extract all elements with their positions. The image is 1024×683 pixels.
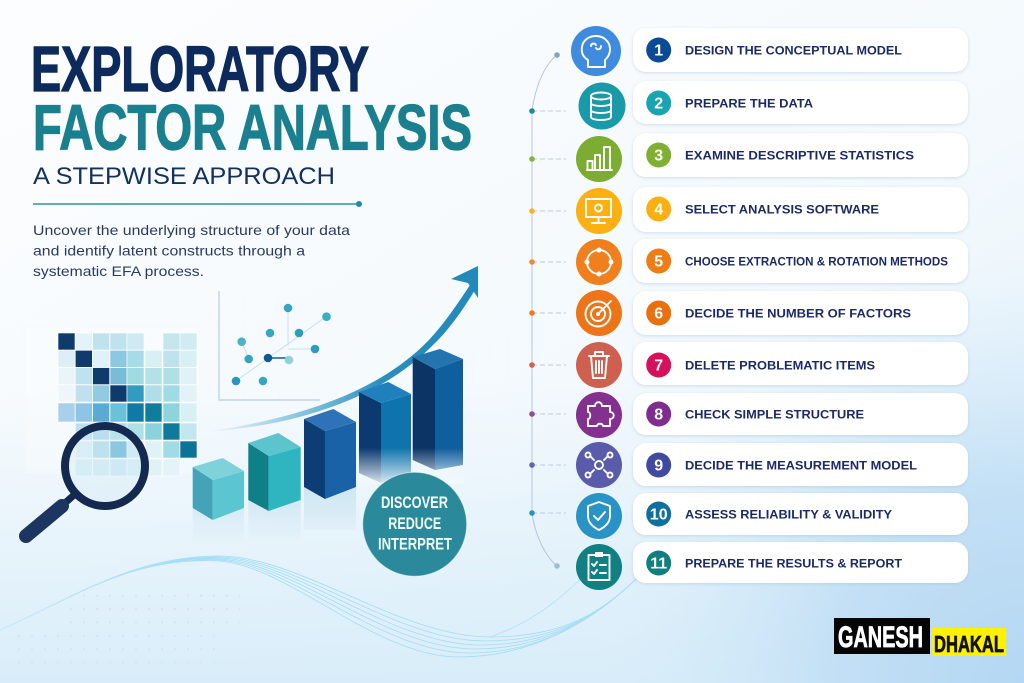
- step 6: DECIDE THE NUMBER OF FACTORS: [685, 306, 911, 320]
- step 9: 9: [654, 458, 663, 474]
- badge: discover reduce interpret: REDUCE: [388, 515, 441, 533]
- badge: discover reduce interpret: INTERPRET: [378, 536, 452, 554]
- step 6: 6: [654, 306, 663, 322]
- step 5: [576, 239, 968, 285]
- icon: magnifying glass: [26, 426, 145, 536]
- step 5: CHOOSE EXTRACTION & ROTATION METHODS: [685, 254, 948, 268]
- tall bar fade: [358, 448, 464, 484]
- step 9: DECIDE THE MEASUREMENT MODEL: [685, 458, 917, 472]
- step 1: DESIGN THE CONCEPTUAL MODEL: [685, 44, 902, 58]
- step 2: PREPARE THE DATA: [685, 96, 813, 110]
- step 3: 3: [654, 148, 663, 164]
- icon: clipboard checklist: [576, 544, 622, 590]
- step 1: [571, 26, 968, 76]
- step 8: [576, 392, 968, 438]
- bar 2: [248, 433, 301, 511]
- step 9: [576, 442, 968, 488]
- icon: trash can: [576, 342, 622, 388]
- badge: discover reduce interpret: [363, 472, 467, 576]
- bar 3: [304, 409, 356, 499]
- 3D bar chart: [193, 349, 464, 545]
- description text: [33, 222, 350, 279]
- icon: head with brain: [571, 26, 621, 76]
- title line 2: FACTOR ANALYSIS: [33, 92, 472, 164]
- step 1: 1: [654, 42, 663, 60]
- step 7: 7: [654, 358, 663, 374]
- icon: bar chart: [576, 136, 622, 182]
- step 2: 2: [654, 96, 663, 112]
- step 10: 10: [650, 506, 668, 524]
- step 11: PREPARE THE RESULTS & REPORT: [685, 556, 903, 570]
- logo: Ganesh: [834, 618, 930, 654]
- logo: Ganesh Dhakal: [834, 618, 1006, 657]
- icon: target: [576, 290, 622, 336]
- step 4: [576, 187, 968, 234]
- icon: shield check: [576, 493, 622, 539]
- title: [31, 33, 472, 164]
- wave ribbon: [0, 556, 638, 657]
- icon: database: [578, 82, 626, 130]
- step 6: [576, 290, 968, 336]
- bar 1: [193, 458, 244, 520]
- growth arrow: [205, 266, 478, 432]
- badge: discover reduce interpret: DISCOVER: [381, 494, 448, 512]
- step 10: ASSESS RELIABILITY & VALIDITY: [685, 508, 892, 522]
- background grid: [219, 291, 509, 401]
- step 3: EXAMINE DESCRIPTIVE STATISTICS: [685, 148, 914, 162]
- description text: and identify latent constructs through a: [33, 242, 305, 258]
- heading divider: [33, 201, 362, 207]
- scatter plot: [219, 291, 331, 400]
- step 8: CHECK SIMPLE STRUCTURE: [685, 408, 864, 422]
- timeline: [529, 52, 566, 569]
- step 7: DELETE PROBLEMATIC ITEMS: [685, 358, 875, 372]
- step 5: 5: [654, 254, 663, 270]
- bar 4: [359, 382, 411, 483]
- step 7: [576, 342, 968, 388]
- heatmap matrix: [24, 327, 199, 476]
- bar reflections: [193, 487, 356, 545]
- description text: systematic EFA process.: [33, 263, 204, 279]
- description text: Uncover the underlying structure of your data: [33, 222, 350, 238]
- step 8: 8: [654, 406, 663, 424]
- step 11: [576, 542, 968, 590]
- logo: Ganesh: GANESH: [838, 621, 923, 654]
- step 4: SELECT ANALYSIS SOFTWARE: [685, 202, 879, 216]
- subtitle: A STEPWISE APPROACH: [33, 163, 335, 190]
- step 10: [576, 493, 968, 539]
- icon: monitor with gear: [576, 188, 622, 234]
- step 2: [578, 81, 968, 130]
- step 11: 11: [650, 556, 667, 572]
- icon: puzzle piece: [576, 392, 622, 438]
- bar 5: [413, 349, 463, 470]
- icon: network nodes: [576, 442, 622, 488]
- title line 1: EXPLORATORY: [31, 33, 369, 105]
- step 4: 4: [654, 202, 663, 218]
- step 3: [576, 133, 968, 182]
- icon: rotation cycle: [576, 239, 622, 285]
